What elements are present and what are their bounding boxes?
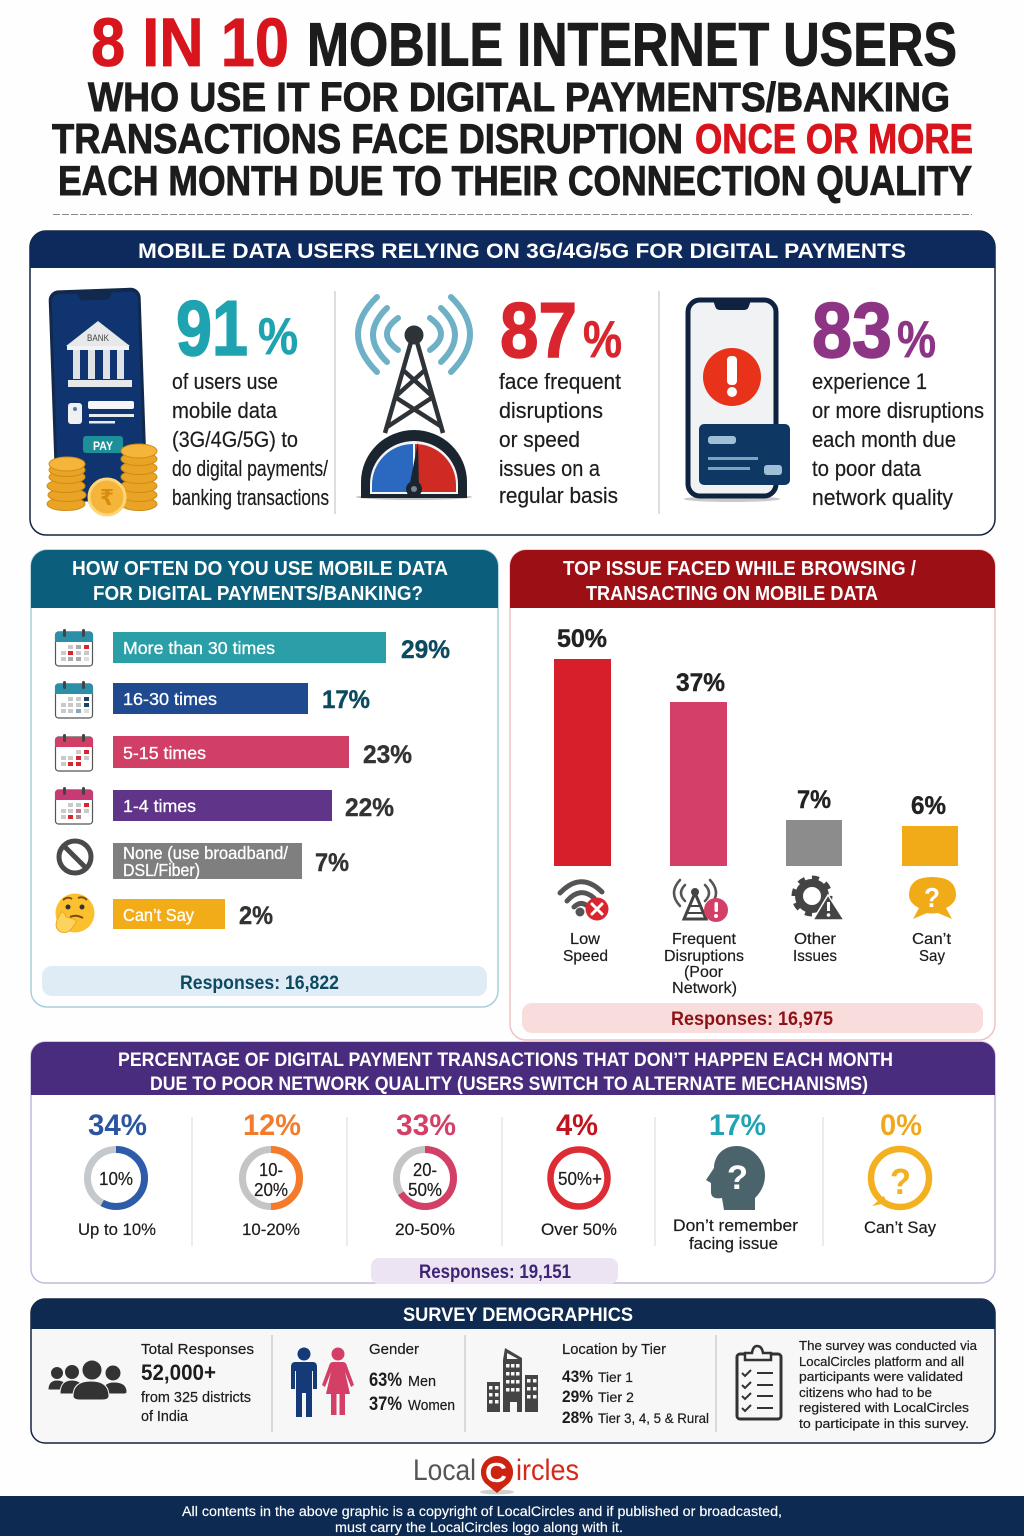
icon: question speech bubble — [909, 877, 956, 919]
item: can't say: ? — [890, 1161, 911, 1202]
icon: tower disruption — [674, 880, 728, 922]
item: don't remember: 17% — [709, 1109, 766, 1142]
bar: none (broadband): 7% — [315, 849, 349, 877]
title: ONCE OR MORE — [695, 115, 973, 162]
stat: 87%: 87 — [500, 286, 577, 374]
stat: 83%: or more disruptions — [812, 398, 984, 423]
bar: none (broadband): None (use broadband/ — [123, 843, 288, 863]
text: gender: Women — [408, 1397, 455, 1414]
panel heading: missed transactions: DUE TO POOR NETWORK QUALITY (USERS SWITCH TO ALTERNATE MECHANISMS) — [150, 1073, 868, 1095]
text: total responses: of India — [141, 1408, 189, 1425]
bar: 16-30 times: 16-30 times — [123, 689, 217, 709]
item: can't say: 0% — [880, 1109, 922, 1142]
stat: 91%: mobile data — [172, 398, 278, 423]
label: frequent disruptions: (Poor — [684, 964, 724, 981]
bar: 16-30 times: 17% — [322, 686, 370, 714]
item: over 50% — [541, 1109, 617, 1239]
stat: 91%: of users use — [172, 369, 278, 394]
bar: 1-4 times: 1-4 times — [123, 796, 196, 816]
bar: 1-4 times — [113, 790, 394, 822]
stat: 87%: face frequent — [499, 369, 621, 394]
stat: 83%: network quality — [812, 485, 953, 510]
item: over 50%: 4% — [556, 1109, 598, 1142]
stat: 91%: % — [258, 308, 298, 366]
item: 20-50%: 50% — [408, 1180, 442, 1200]
responses pill: 16,822 — [42, 966, 487, 996]
item: 10-20%: 10-20% — [242, 1220, 300, 1239]
item: 10-20% — [242, 1109, 301, 1239]
icon: thinking face — [56, 894, 94, 932]
title: TRANSACTIONS FACE DISRUPTION — [52, 115, 683, 162]
item: 20-50%: 20-50% — [395, 1220, 455, 1239]
icon: calendar magenta — [55, 787, 93, 824]
panel heading: mobile data users: MOBILE DATA USERS RELYING ON 3G/4G/5G FOR DIGITAL PAYMENTS — [138, 239, 906, 263]
panel heading: missed transactions: PERCENTAGE OF DIGITAL PAYMENT TRANSACTIONS THAT DON’T HAPPEN EACH MONTH — [118, 1049, 893, 1071]
icon: city buildings — [487, 1348, 538, 1412]
panel heading: survey demographics: SURVEY DEMOGRAPHICS — [403, 1304, 633, 1326]
stat: 91%: do digital payments/ — [172, 456, 329, 481]
stat: 83% — [812, 286, 984, 510]
label: frequent disruptions — [664, 931, 744, 997]
item: 10-20%: 10- — [259, 1160, 283, 1180]
item: 20-50%: 20- — [413, 1160, 437, 1180]
bar chart: top issues: 37% — [676, 669, 725, 697]
item: over 50%: 50%+ — [558, 1169, 602, 1189]
text: gender — [369, 1341, 455, 1415]
text: location by tier: Location by Tier — [562, 1341, 666, 1358]
label: other issues: Issues — [793, 948, 837, 965]
item: can't say: Can’t Say — [864, 1218, 936, 1237]
stat: 83%: 83 — [812, 286, 892, 374]
stat: 87%: regular basis — [499, 483, 618, 508]
panel heading: top issue: TOP ISSUE FACED WHILE BROWSING / — [563, 557, 916, 580]
label: low speed: Speed — [563, 948, 608, 965]
label: frequent disruptions: Network) — [672, 980, 737, 997]
icon: clipboard checklist — [737, 1346, 781, 1419]
text: total responses: from 325 districts — [141, 1389, 251, 1406]
icon: no sign — [59, 841, 91, 873]
icon: calendar teal — [55, 629, 93, 666]
bar chart: top issues: 7% — [797, 786, 831, 814]
stat: 91% — [172, 284, 329, 510]
item: 20-50%: 33% — [396, 1109, 456, 1142]
panel: mobile data users — [30, 231, 995, 535]
responses pill: 16,975: Responses: 16,975 — [671, 1008, 833, 1030]
logo: LocalCircles — [413, 1454, 579, 1494]
text: survey method note: The survey was conducted via — [799, 1338, 978, 1353]
bar: can't say — [113, 899, 273, 930]
panel: top issue faced — [510, 550, 995, 1040]
label: other issues: Other — [794, 931, 837, 948]
text: survey method note: citizens who had to be — [799, 1385, 932, 1400]
text: location by tier — [562, 1341, 709, 1427]
bar: can't say: Can’t Say — [123, 905, 194, 925]
text: location by tier: 29% — [562, 1387, 593, 1406]
item: up to 10%: 34% — [88, 1109, 147, 1142]
text: gender: Men — [408, 1373, 436, 1390]
icon: question speech bubble: ? — [924, 882, 940, 913]
text: location by tier: Tier 1 — [598, 1369, 633, 1385]
item: don't remember — [673, 1109, 798, 1253]
bar: more than 30 times: 29% — [401, 636, 450, 664]
panel heading: usage frequency: FOR DIGITAL PAYMENTS/BANKING? — [93, 582, 423, 605]
logo: LocalCircles: ircles — [516, 1454, 579, 1487]
footer: copyright notice — [0, 1496, 1024, 1536]
panel heading: top issue — [510, 550, 995, 608]
stat: 91%: (3G/4G/5G) to — [172, 427, 298, 452]
responses pill: 19,151 — [371, 1258, 618, 1284]
bar: 5-15 times: 5-15 times — [123, 743, 206, 763]
icon: people group — [48, 1360, 127, 1400]
bar: can't say: 2% — [239, 902, 273, 930]
item: 10-20%: 20% — [254, 1180, 288, 1200]
bar: 5-15 times — [113, 736, 412, 769]
panel heading: usage frequency — [31, 550, 498, 608]
text: survey method note: to participate in this survey. — [799, 1416, 969, 1431]
panel heading: mobile data users — [30, 231, 995, 268]
item: 20-50% — [395, 1109, 456, 1239]
icon: bank phone with coins: ₹ — [100, 486, 114, 511]
panel heading: missed transactions — [31, 1042, 995, 1095]
text: total responses: Total Responses — [141, 1341, 254, 1358]
bar: 5-15 times: 23% — [363, 741, 412, 769]
stat: 83%: to poor data — [812, 456, 922, 481]
icon: phone alert with card — [684, 300, 790, 502]
text: location by tier: Tier 3, 4, 5 & Rural — [598, 1410, 709, 1426]
stat: 87%: or speed — [499, 427, 580, 452]
icon: gear warning — [794, 878, 844, 920]
label: can't say: Can’t — [912, 931, 952, 948]
panel: how often do you use mobile data — [31, 550, 498, 1007]
footer: copyright notice: All contents in the above graphic is a copyright of LocalCircles and if published or broadcasted, — [182, 1504, 782, 1519]
logo: LocalCircles: C — [485, 1457, 507, 1488]
bar chart: top issues — [554, 625, 958, 866]
title: 8 IN 10 — [91, 4, 289, 81]
item: can't say — [864, 1109, 936, 1237]
text: location by tier: 28% — [562, 1408, 593, 1427]
text: gender: 37% — [369, 1394, 402, 1415]
item: up to 10%: 10% — [99, 1169, 133, 1189]
text: survey method note: LocalCircles platform and all — [799, 1354, 964, 1369]
bar: more than 30 times: More than 30 times — [123, 638, 275, 658]
label: frequent disruptions: Disruptions — [664, 948, 744, 965]
stat: 87%: issues on a — [499, 456, 601, 481]
stat: 83%: each month due — [812, 427, 956, 452]
icon: signal tower with speedometer — [356, 297, 472, 500]
item: up to 10% — [78, 1109, 156, 1239]
text: gender: Gender — [369, 1341, 419, 1358]
stat: 87% — [499, 286, 622, 508]
item: don't remember: ? — [727, 1159, 748, 1197]
text: total responses — [141, 1341, 254, 1425]
item: don't remember: facing issue — [689, 1234, 778, 1253]
bar chart: top issues: 50% — [557, 625, 607, 653]
text: gender: 63% — [369, 1370, 402, 1391]
text: total responses: 52,000+ — [141, 1360, 216, 1385]
bar: none (broadband): DSL/Fiber) — [123, 860, 200, 880]
label: other issues — [793, 931, 837, 965]
bar: none (broadband) — [113, 843, 349, 880]
panel heading: top issue: TRANSACTING ON MOBILE DATA — [586, 582, 878, 605]
icon: bank phone with coins: BANK — [87, 333, 109, 343]
responses pill: 16,822: Responses: 16,822 — [180, 972, 339, 994]
item: don't remember: Don’t remember — [673, 1216, 798, 1235]
item: 10-20%: 12% — [243, 1109, 301, 1142]
text: survey method note: participants were validated — [799, 1369, 963, 1384]
text: survey method note — [799, 1338, 978, 1431]
stat: 83%: % — [897, 311, 936, 369]
text: survey method note: registered with LocalCircles — [799, 1400, 970, 1415]
bar: 1-4 times: 22% — [345, 794, 394, 822]
stat: 87%: disruptions — [499, 398, 603, 423]
panel heading: usage frequency: HOW OFTEN DO YOU USE MOBILE DATA — [72, 557, 448, 580]
stat: 87%: % — [583, 311, 622, 369]
bar chart: top issues: 6% — [911, 792, 946, 820]
panel: survey demographics — [31, 1299, 995, 1443]
bar: 16-30 times — [113, 683, 370, 714]
icon: bank phone with coins: PAY — [93, 439, 113, 453]
label: low speed — [563, 931, 608, 965]
title — [52, 4, 973, 204]
responses pill: 16,975 — [522, 1003, 983, 1033]
icon: calendar blue — [55, 681, 93, 718]
label: low speed: Low — [570, 931, 600, 948]
item: up to 10%: Up to 10% — [78, 1220, 156, 1239]
icon: man and woman — [291, 1348, 354, 1417]
icon: calendar pink — [55, 734, 93, 771]
icon: wifi low speed — [560, 882, 608, 920]
stat: 91%: 91 — [176, 284, 248, 372]
icon: bank phone with coins — [47, 287, 157, 515]
label: frequent disruptions: Frequent — [672, 931, 737, 948]
text: location by tier: 43% — [562, 1367, 593, 1386]
bar: more than 30 times — [113, 632, 450, 664]
item: over 50%: Over 50% — [541, 1220, 617, 1239]
title: WHO USE IT FOR DIGITAL PAYMENTS/BANKING — [88, 74, 950, 120]
panel heading: survey demographics — [31, 1299, 995, 1329]
text: location by tier: Tier 2 — [598, 1389, 634, 1405]
panel: transactions that don't happen — [31, 1042, 995, 1284]
label: can't say — [912, 931, 952, 965]
responses pill: 19,151: Responses: 19,151 — [419, 1262, 571, 1283]
logo: LocalCircles: Local — [413, 1454, 476, 1487]
footer: copyright notice: must carry the LocalCircles logo along with it. — [335, 1520, 623, 1535]
stat: 83%: experience 1 — [812, 369, 927, 394]
stat: 91%: banking transactions — [172, 485, 329, 510]
label: can't say: Say — [919, 948, 945, 965]
